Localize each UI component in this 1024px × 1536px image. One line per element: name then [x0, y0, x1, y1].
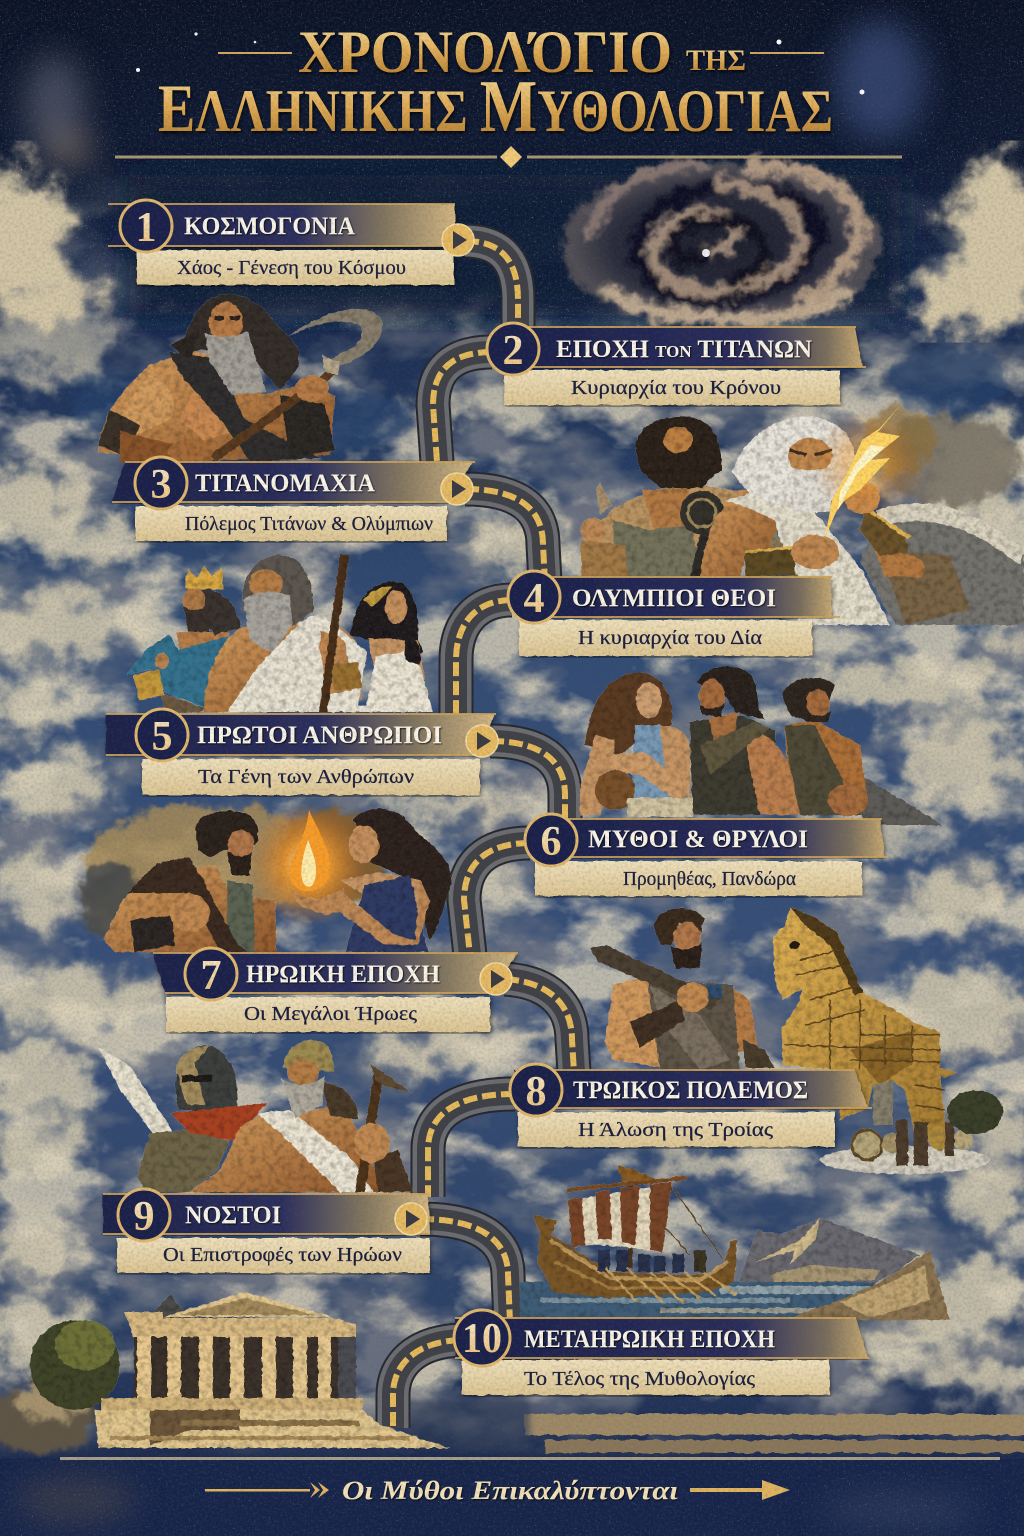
play marker	[395, 1203, 427, 1235]
parchment	[135, 506, 447, 541]
nebula	[25, 20, 925, 168]
soldiers	[896, 1120, 954, 1166]
stage 5 banner	[106, 709, 498, 795]
subtitle: Το Τέλος της Μυθολογίας	[524, 1368, 755, 1390]
horizon strips	[525, 1414, 1024, 1453]
Trojan horse	[773, 907, 958, 1135]
stage 3 banner	[112, 457, 475, 541]
header ribbon	[112, 462, 473, 502]
warrior	[580, 485, 745, 577]
axe	[355, 1072, 384, 1192]
title text: ΠΡΩΤΟΙ ΑΝΘΡΩΠΟΙ	[197, 722, 442, 749]
corner clouds	[0, 150, 1024, 333]
number badge	[135, 457, 187, 509]
footer caption: Οι Μύθοι Επικαλύπτονται	[342, 1476, 678, 1505]
illustration: Greek temple	[30, 1292, 450, 1448]
cloak mountain	[860, 508, 1024, 625]
illustration: cosmic galaxy swirl	[562, 161, 882, 329]
third man	[785, 720, 867, 815]
lightning bolt	[813, 402, 923, 538]
mast and sail	[628, 1178, 633, 1268]
number badge	[454, 1310, 510, 1366]
road 2 to 3	[433, 352, 492, 462]
illustration: ship, sea and mountains	[520, 1165, 950, 1320]
footer divider	[60, 1457, 1000, 1460]
header ribbon	[520, 577, 832, 617]
parchment	[462, 1360, 830, 1395]
left warrior	[137, 1130, 230, 1192]
central man	[690, 715, 777, 815]
sea	[520, 1282, 873, 1320]
number badge	[525, 814, 577, 866]
cloak	[845, 768, 943, 825]
title text: ΤΙΤΑΝΟΜΑΧΙΑ	[195, 470, 375, 497]
goddess	[350, 581, 424, 660]
stage 9 banner	[103, 1189, 430, 1273]
stage 10 banner	[454, 1310, 870, 1395]
header ribbon	[500, 327, 862, 367]
subtitle: Η κυριαρχία του Δία	[578, 627, 763, 649]
title text: ΜΥΘΟΙ & ΘΡΥΛΟΙ	[588, 826, 808, 853]
play marker	[480, 963, 512, 995]
header ribbon	[106, 714, 494, 755]
lower rocks left	[0, 1380, 95, 1455]
parchment	[137, 250, 454, 285]
illustration: first humans	[580, 666, 943, 825]
parchment	[166, 997, 490, 1032]
illustration: hero and Trojan horse	[590, 907, 1003, 1174]
number badge: 2	[502, 328, 524, 374]
road 8 to 9	[428, 1094, 515, 1197]
storm backdrop	[865, 405, 1020, 505]
road 6 to 7	[464, 843, 530, 955]
bearded warrior	[190, 1107, 385, 1192]
golden backdrop	[80, 805, 385, 940]
number badge	[120, 200, 172, 252]
heading line two: ΕΛΛΗΝΙΚΗΣ ΜΥΘΟΛΟΓΙΑΣ	[158, 66, 833, 148]
subtitle: Τα Γένη των Ανθρώπων	[198, 766, 414, 788]
number badge: 10	[462, 1316, 502, 1362]
play marker	[466, 725, 498, 757]
woman	[585, 672, 673, 755]
header ribbon	[515, 1070, 868, 1108]
road 4 to 5	[456, 600, 512, 716]
header ribbon	[535, 819, 885, 857]
road 7 to 8	[505, 979, 574, 1072]
road 3 to 4	[465, 489, 545, 582]
stage 8 banner	[510, 1064, 872, 1147]
subtitle: Οι Μεγάλοι Ήρωες	[244, 1003, 417, 1025]
subtitle: Η Άλωση της Τροίας	[578, 1119, 773, 1141]
subtitle: Πόλεμος Τιτάνων & Ολύμπιων	[185, 513, 433, 535]
title text: ΤΡΩΙΚΟΣ ΠΟΛΕΜΟΣ	[573, 1077, 808, 1104]
road 9 to 10	[420, 1219, 510, 1322]
number badge: 6	[540, 819, 562, 865]
illustration: Prometheus and Pandora with fire	[80, 803, 452, 952]
title	[158, 19, 833, 148]
woman	[352, 809, 452, 940]
decorative roads connecting the stages	[393, 241, 574, 1428]
road 10 final	[393, 1340, 460, 1428]
number badge: 4	[524, 576, 544, 622]
title ornament lines	[115, 52, 902, 168]
heading word: της: ΤΗΣ	[686, 44, 746, 77]
rock	[783, 1250, 950, 1320]
number badge	[185, 948, 237, 1000]
parchment	[504, 370, 840, 405]
play marker	[441, 473, 473, 505]
parchment	[117, 1238, 430, 1273]
road 5 to 6	[490, 741, 565, 822]
number badge	[118, 1189, 170, 1241]
parchment	[142, 759, 480, 795]
subtitle: Οι Επιστροφές των Ηρώων	[163, 1244, 402, 1266]
illustration: Zeus with lightning and warrior	[580, 402, 1024, 625]
number badge	[136, 709, 188, 761]
title text: ΜΕΤΑΗΡΩΙΚΗ ΕΠΟΧΗ	[524, 1326, 776, 1353]
header ribbon	[103, 1194, 430, 1234]
hull	[532, 1215, 737, 1298]
title text: ΟΛΥΜΠΙΟΙ ΘΕΟΙ	[572, 585, 776, 612]
number badge: 5	[152, 714, 172, 760]
illustration: Kronos with sickle	[98, 294, 382, 465]
title text: ΚΟΣΜΟΓΟΝΙΑ	[184, 213, 355, 240]
number badge: 8	[526, 1069, 546, 1115]
parchment	[518, 1112, 835, 1147]
road 1 to 2	[465, 241, 518, 332]
stage 7 banner	[153, 948, 518, 1032]
elder	[203, 622, 330, 712]
header ribbon	[455, 1318, 868, 1358]
night region dark overlay	[130, 175, 900, 315]
title text: ΗΡΩΙΚΗ ΕΠΟΧΗ	[246, 961, 441, 988]
stage 1 banner	[108, 200, 474, 285]
hero	[605, 975, 665, 1068]
play marker	[442, 224, 474, 256]
number badge: 9	[134, 1194, 154, 1240]
subtitle: Χάος - Γένεση του Κόσμου	[177, 257, 406, 279]
right arrow	[690, 1480, 790, 1500]
number badge	[487, 323, 539, 375]
parchment	[519, 620, 812, 656]
subtitle: Κυριαρχία του Κρόνου	[571, 377, 781, 399]
number badge: 7	[200, 953, 222, 999]
number badge: 3	[150, 462, 172, 508]
right arm and fist	[875, 550, 925, 578]
wheels and platform	[852, 1126, 973, 1160]
sword	[98, 1047, 180, 1150]
title text: ΝΟΣΤΟΙ	[185, 1202, 281, 1229]
stage 4 banner	[508, 571, 840, 656]
left arrow	[205, 1482, 329, 1498]
parchment	[535, 861, 862, 896]
subtitle: Προμηθέας, Πανδώρα	[623, 868, 796, 890]
rowers	[598, 1250, 706, 1272]
header ribbon	[153, 953, 518, 993]
deep blue sky openings	[70, 345, 1010, 1105]
mountain	[737, 1218, 920, 1285]
stage 6 banner	[525, 814, 888, 896]
flame	[290, 810, 330, 891]
man	[103, 865, 277, 952]
number badge	[508, 571, 560, 623]
king	[177, 632, 230, 668]
number badge	[510, 1064, 562, 1116]
tree	[30, 1320, 120, 1410]
number badge: 1	[136, 205, 156, 251]
footer arrows and caption	[205, 1476, 790, 1505]
header ribbon	[108, 204, 455, 246]
Zeus	[700, 490, 779, 577]
ground cloud	[820, 1146, 990, 1174]
illustration: Olympian king, elder and goddess	[127, 555, 433, 712]
far gable	[147, 1295, 192, 1318]
stage 2 banner	[487, 323, 866, 405]
title text: ΕΠΟΧΗ ΤΟΝ ΤΙΤΑΝΩΝ	[556, 336, 812, 363]
heading line one: ΧΡΟΝΟΛΌΓΙΟ	[298, 19, 672, 85]
illustration: returning warriors	[98, 1040, 413, 1192]
